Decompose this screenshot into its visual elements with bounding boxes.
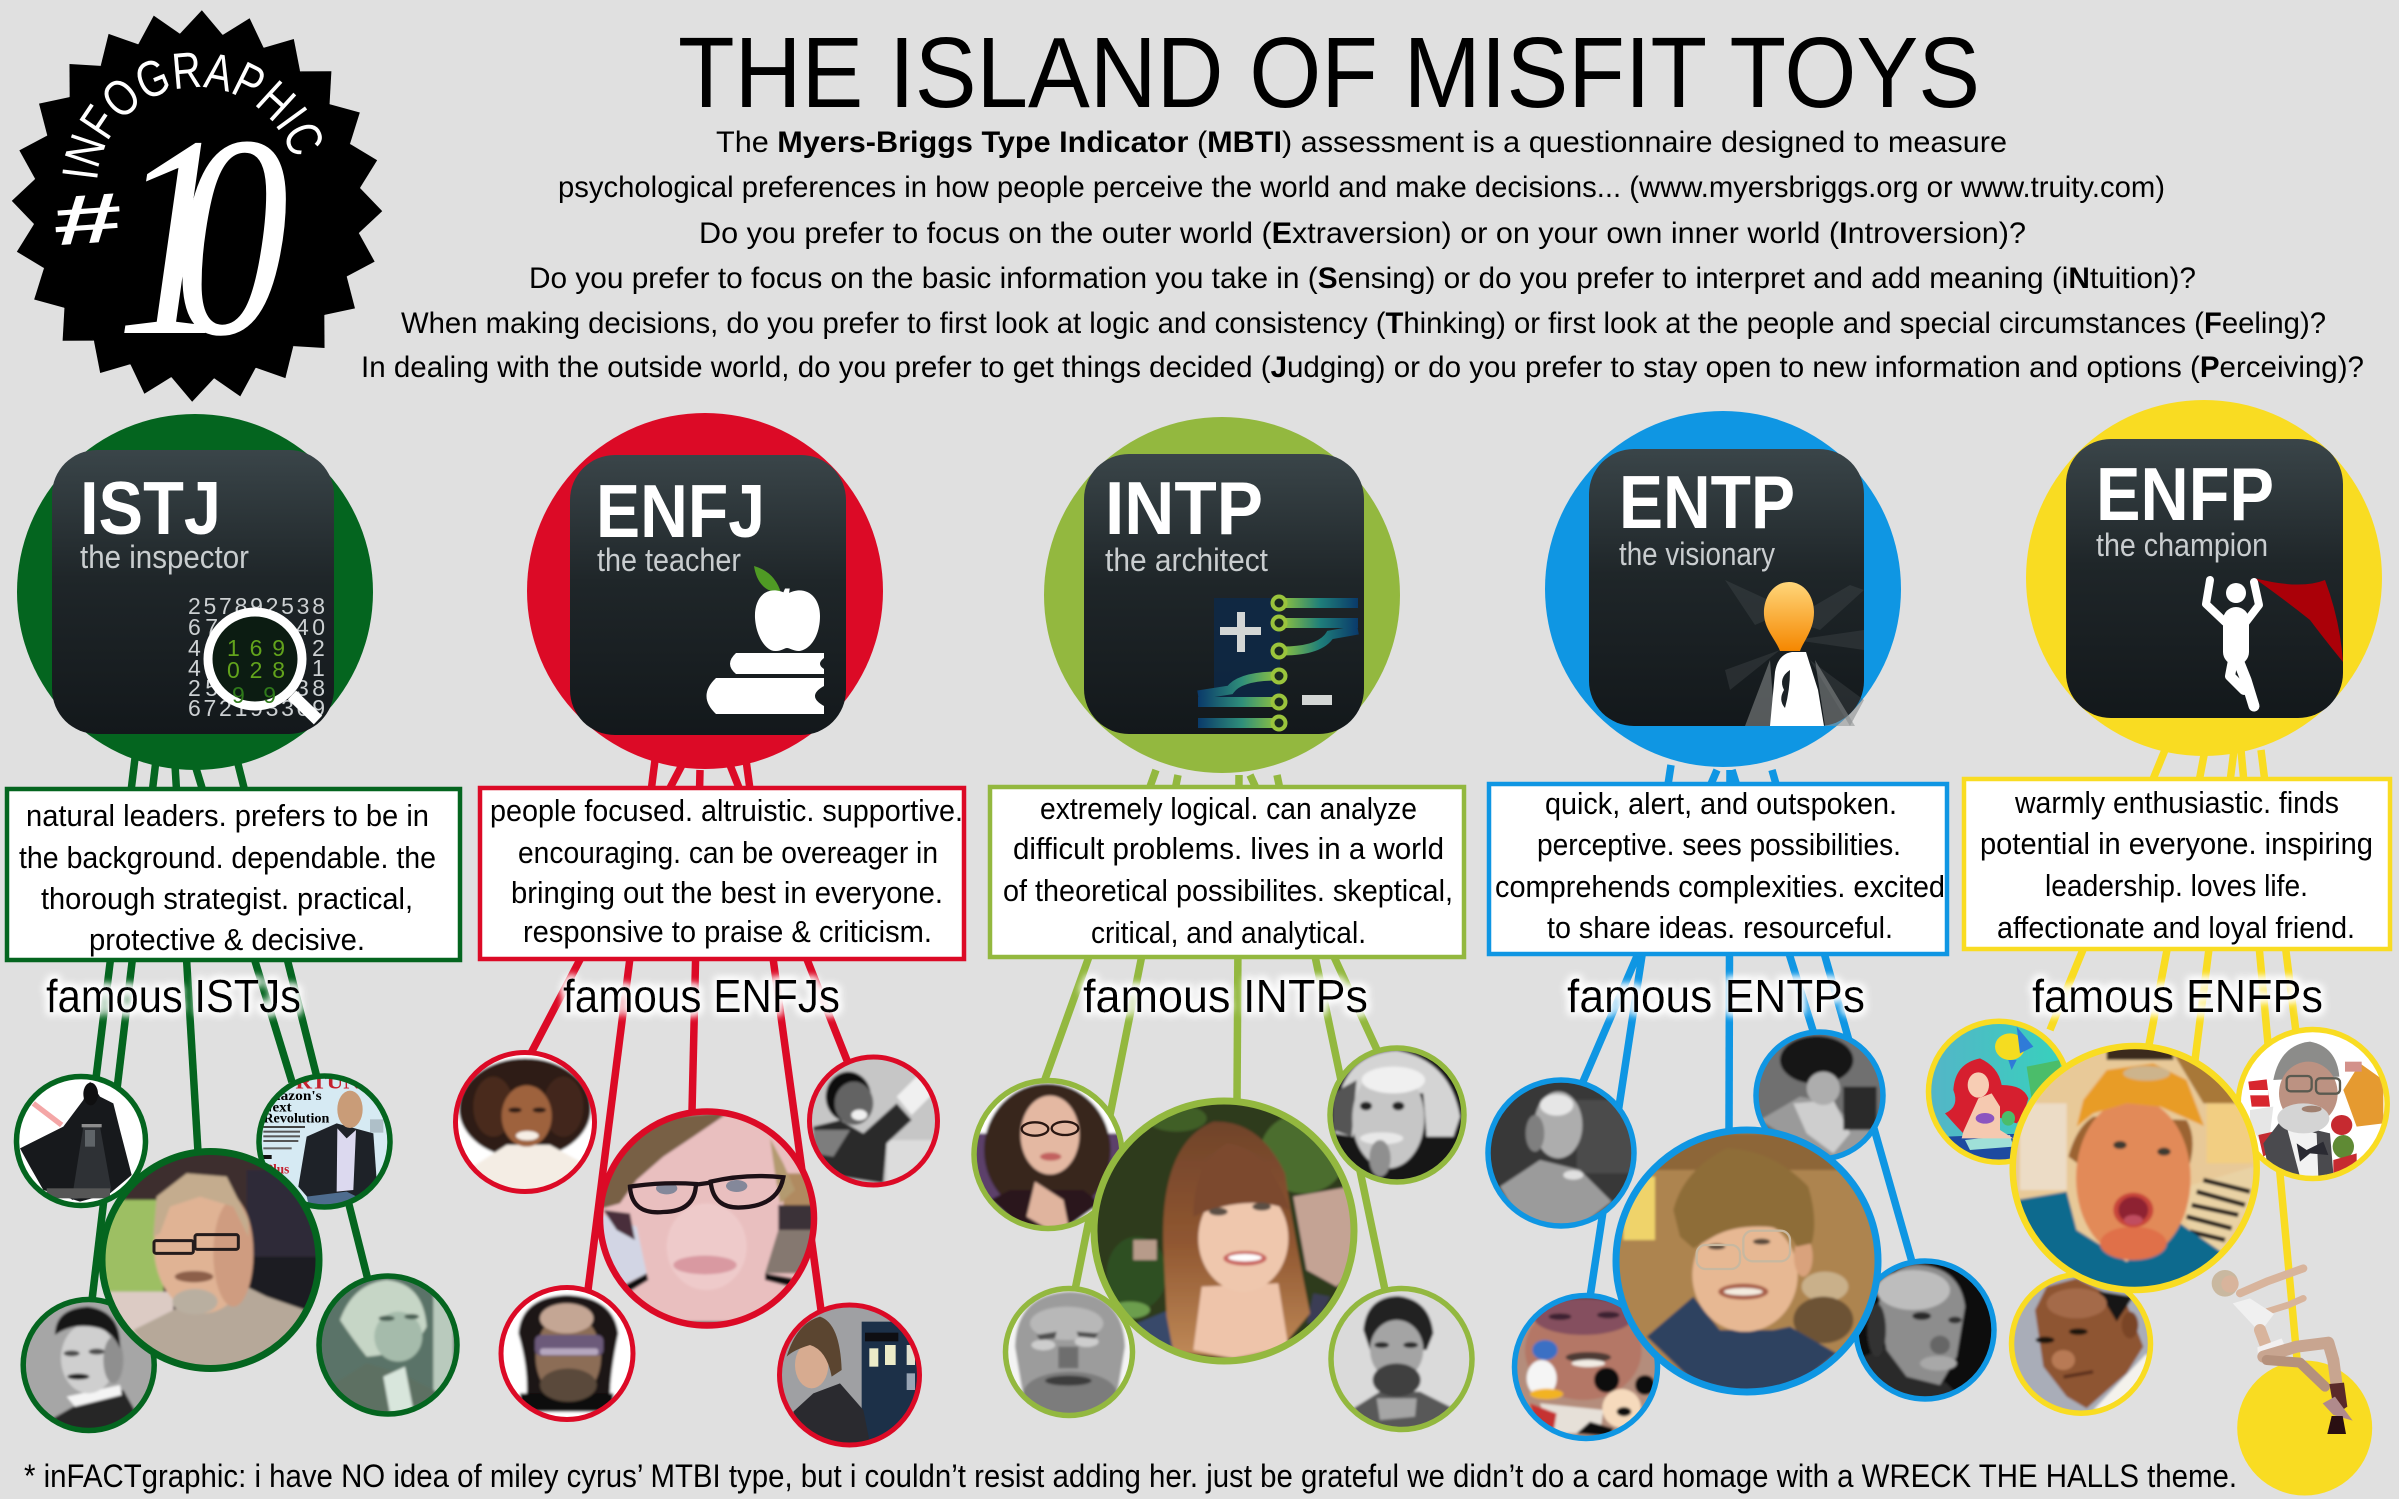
icon: digits and magnifier: 99 — [232, 682, 276, 708]
description text: affectionate and loyal friend. — [1997, 910, 2355, 945]
intro text: When making decisions, do you prefer to first look at logic and consistency (Thinking) or first look at the people and special circumstances (Feeling)? — [401, 307, 2326, 340]
connector lines — [1044, 770, 1385, 1290]
badge arc text: INFOGRAPHIC — [62, 52, 322, 178]
intro text: psychological preferences in how people perceive the world and make decisions... (www.myersbriggs.org or www.truity.com) — [558, 171, 2165, 204]
description text — [1980, 785, 2373, 945]
description text: perceptive. sees possibilities. — [1537, 827, 1901, 862]
description box — [480, 788, 964, 959]
starburst — [11, 10, 383, 402]
footnote: * inFACTgraphic: i have NO idea of miley cyrus’ MTBI type, but i couldn’t resist adding her. just be grateful we didn’t do a card homage with a WRECK THE HALLS theme. — [24, 1458, 2237, 1494]
icon: light bulb and hand — [1725, 580, 1864, 726]
type card: the champion — [2096, 527, 2268, 563]
portrait: Jeff Bezos — [256, 1073, 393, 1210]
description text: difficult problems. lives in a world — [1013, 831, 1444, 866]
panel: ENTP — [1483, 411, 2000, 1443]
description box — [1489, 784, 1947, 954]
connector lines — [1582, 765, 1912, 1297]
type card: the visionary — [1619, 536, 1775, 572]
description text: people focused. altruistic. supportive. — [490, 793, 963, 828]
portrait: Abraham Lincoln — [1325, 1283, 1478, 1433]
icon: digits and magnifier: 25 — [188, 675, 218, 701]
famous heading: famous ENFJs — [563, 970, 840, 1022]
badge hash: # — [50, 178, 125, 260]
connector lines — [92, 750, 368, 1300]
portrait: Socrates — [1000, 1283, 1140, 1423]
portrait: Jeff Bezos: Revolution — [263, 1112, 330, 1127]
description text: natural leaders. prefers to be in — [26, 798, 429, 833]
famous heading: famous ISTJs — [46, 970, 301, 1022]
portrait: Jeff Bezos: Amazon's — [257, 1089, 322, 1104]
intro text: The Myers-Briggs Type Indicator (MBTI) assessment is a questionnaire designed to measure — [716, 126, 2007, 159]
portrait: Walt Disney — [1510, 1290, 1663, 1443]
panel: ENFP — [24, 400, 2393, 1496]
portrait: Leonardo da Vinci — [1750, 1030, 1890, 1163]
type circle — [1044, 417, 1400, 773]
description text: extremely logical. can analyze — [1040, 791, 1417, 826]
description text: encouraging. can be overeager in — [518, 835, 938, 870]
description text: to share ideas. resourceful. — [1547, 910, 1893, 945]
portrait: Tina Fey — [971, 1078, 1124, 1232]
icon: digits and magnifier: 1 — [312, 655, 325, 681]
type card: ENFP — [2096, 452, 2274, 536]
description text: warmly enthusiastic. finds — [2014, 785, 2339, 820]
type card: INTP — [1105, 466, 1263, 550]
description text: bringing out the best in everyone. — [511, 875, 943, 910]
type card — [2066, 439, 2343, 718]
description text: of theoretical possibilites. skeptical, — [1003, 873, 1453, 908]
connector lines — [2050, 750, 2298, 1370]
icon: digits and magnifier: 028 — [227, 657, 285, 683]
intro text: Do you prefer to focus on the outer world ( Extraversion) or on your own inner world ( Introversion)? — [699, 217, 2026, 250]
portrait: Bill Cosby — [2007, 1268, 2157, 1418]
icon: digits and magnifier: 67 — [188, 614, 218, 640]
description box — [7, 789, 460, 960]
icon: digits and magnifier: 672193309 — [188, 695, 325, 721]
portrait: Ariel — [1923, 1017, 2070, 1167]
panel: INTP — [967, 417, 1478, 1433]
type card — [1084, 454, 1364, 734]
description text — [19, 798, 436, 957]
portrait: Jeff Bezos: FORTUNE — [263, 1071, 375, 1093]
icon: digits and magnifier: 2 — [312, 635, 325, 661]
description text — [490, 793, 963, 949]
portrait: Matt Smith — [773, 1300, 923, 1450]
description box — [990, 787, 1464, 957]
icon: digits and magnifier: 40 — [296, 614, 325, 640]
portrait: ENTP author — [1610, 1123, 1883, 1397]
portrait: Martin Luther King — [803, 1053, 943, 1190]
type card: ENFJ — [596, 469, 765, 553]
portrait: Alfred Hitchcock — [1850, 1255, 2000, 1405]
description text: potential in everyone. inspiring — [1980, 826, 2373, 861]
description text: critical, and analytical. — [1091, 915, 1366, 950]
icon: apple and books — [706, 566, 824, 714]
type card: the teacher — [597, 542, 741, 578]
type card: the architect — [1105, 542, 1268, 578]
portrait: ISTJ author — [93, 1143, 327, 1377]
type circle — [2026, 400, 2382, 756]
portrait: Albert Einstein — [1323, 1043, 1470, 1187]
description text: the background. dependable. the — [19, 840, 436, 875]
type circle — [17, 414, 373, 770]
description text: quick, alert, and outspoken. — [1545, 786, 1897, 821]
type card — [570, 455, 846, 735]
type card: ENTP — [1619, 460, 1795, 544]
description text: responsive to praise & criticism. — [523, 914, 932, 949]
type circle — [527, 413, 883, 769]
type card — [52, 450, 334, 734]
panel: ENFJ — [450, 413, 964, 1450]
description text — [1495, 786, 1945, 945]
icon: circuit with plus and minus — [1198, 596, 1358, 730]
icon: digits and magnifier — [188, 593, 325, 721]
connector lines — [530, 760, 850, 1310]
portrait: ENFJ author — [593, 1103, 820, 1333]
portrait: Jeff Bezos: Plus — [265, 1162, 290, 1177]
icon: digits and magnifier: 4 — [188, 655, 201, 681]
badge number: 10 — [116, 78, 289, 396]
type card: the inspector — [80, 539, 249, 575]
intro text: Do you prefer to focus on the basic information you take in (Sensing) or do you prefer to interpret and add meaning (iNtuition)? — [529, 262, 2196, 295]
portrait: Oprah Winfrey — [450, 1047, 603, 1197]
portrait: INTP author — [1087, 1097, 1363, 1367]
portrait: Benjamin Franklin — [1483, 1077, 1640, 1230]
portrait: Bono — [497, 1283, 640, 1423]
description box — [1964, 779, 2390, 949]
description text: leadership. loves life. — [2045, 868, 2308, 903]
portrait: Nikola Tesla — [17, 1293, 160, 1437]
infographic badge — [12, 10, 382, 402]
intro text — [361, 126, 2364, 384]
icon: digits and magnifier: 4 — [188, 635, 201, 661]
panel: ISTJ — [7, 414, 463, 1437]
icon: caped figure — [2206, 578, 2343, 706]
portrait: ENFP author — [2007, 1040, 2263, 1297]
icon: digits and magnifier: 257892538 — [188, 593, 325, 619]
title: THE ISLAND OF MISFIT TOYS — [678, 17, 1980, 129]
description text: comprehends complexities. excited — [1495, 869, 1945, 904]
famous heading: famous ENTPs — [1567, 970, 1865, 1022]
famous heading: famous ENFPs — [2032, 970, 2323, 1022]
icon: digits and magnifier: 169 — [227, 635, 285, 661]
portrait: Darth Vader — [14, 1074, 148, 1208]
description text — [1003, 791, 1453, 950]
famous heading: famous INTPs — [1083, 970, 1368, 1022]
description text: thorough strategist. practical, — [41, 881, 413, 916]
type card: ISTJ — [80, 466, 221, 550]
description text: protective & decisive. — [89, 922, 365, 957]
type circle — [1545, 411, 1901, 767]
intro text: In dealing with the outside world, do you prefer to get things decided (Judging) or do you prefer to stay open to new information and options (Perceiving)? — [361, 351, 2364, 384]
figure: Miley Cyrus on wrecking ball — [2212, 1268, 2353, 1434]
portrait: George Washington — [313, 1270, 463, 1420]
circle: Miley Cyrus base — [2237, 1360, 2372, 1496]
icon: digits and magnifier: 38 — [296, 675, 325, 701]
portrait: Jeff Bezos: Next — [262, 1101, 292, 1116]
type card — [1589, 449, 1864, 726]
portrait: Dr. Seuss — [2233, 1023, 2393, 1183]
